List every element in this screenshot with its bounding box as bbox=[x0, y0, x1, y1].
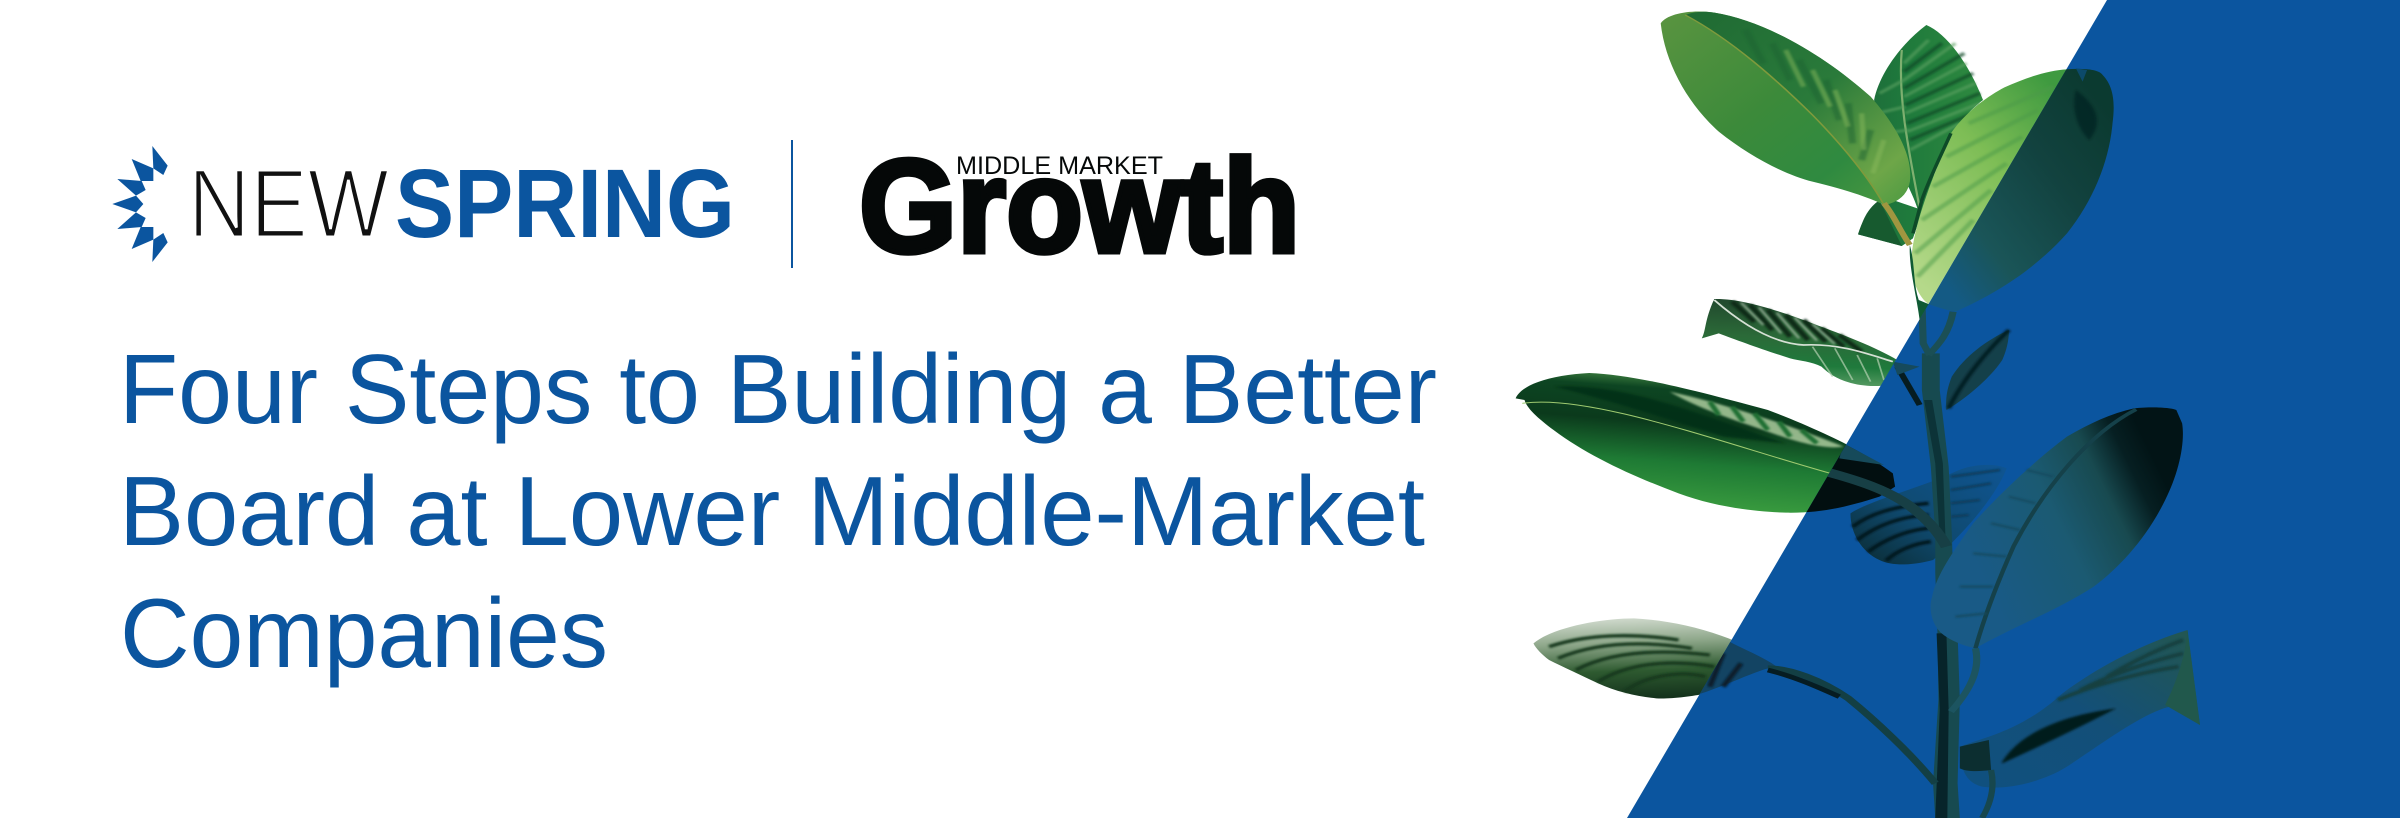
leaf: front leaf, tinted right half bbox=[1929, 68, 2114, 312]
blue diagonal panel bbox=[1627, 0, 2400, 818]
leaf: lower right leaf bbox=[1960, 630, 2200, 818]
title: Board at Lower Middle-Market bbox=[119, 456, 1425, 566]
plant: leaves tinted over blue panel bbox=[1696, 68, 2200, 818]
branch and small upper leaf bbox=[1893, 302, 2009, 410]
leaf: back upright leaf bbox=[1858, 25, 1983, 246]
leaf: tip of large left leaf bbox=[1806, 444, 1952, 548]
leaf: large top-left leaf bbox=[1661, 12, 1910, 245]
wordmark: Growth: Growth bbox=[859, 133, 1300, 281]
title: Four Steps to Building a Better bbox=[119, 334, 1437, 444]
plant: leaves on white background bbox=[1516, 12, 2067, 698]
divider bbox=[791, 140, 793, 268]
icon: NewSpring burst bbox=[112, 146, 168, 262]
leaf: large right leaf bbox=[1931, 407, 2183, 712]
stem bbox=[1922, 353, 1960, 818]
title: Companies bbox=[120, 578, 608, 688]
title bbox=[119, 334, 1437, 688]
leaf: small mid leaf bbox=[1702, 299, 1897, 386]
wordmark: NEW: NEW bbox=[188, 149, 389, 258]
leaf: lower left leaf bbox=[1533, 618, 1737, 698]
logo: NewSpring bbox=[112, 146, 735, 262]
leaf: tip of lower left leaf and stalk bbox=[1696, 638, 1935, 783]
logo: Middle Market Growth bbox=[859, 133, 1300, 281]
wordmark: Middle Market: MIDDLE MARKET bbox=[956, 152, 1163, 180]
leaf: large left leaf bbox=[1516, 373, 1895, 513]
wordmark: SPRING: SPRING bbox=[395, 149, 735, 258]
leaf: front light leaf, left half bbox=[1910, 69, 2067, 328]
leaf: faint back leaf bbox=[1850, 465, 2007, 564]
